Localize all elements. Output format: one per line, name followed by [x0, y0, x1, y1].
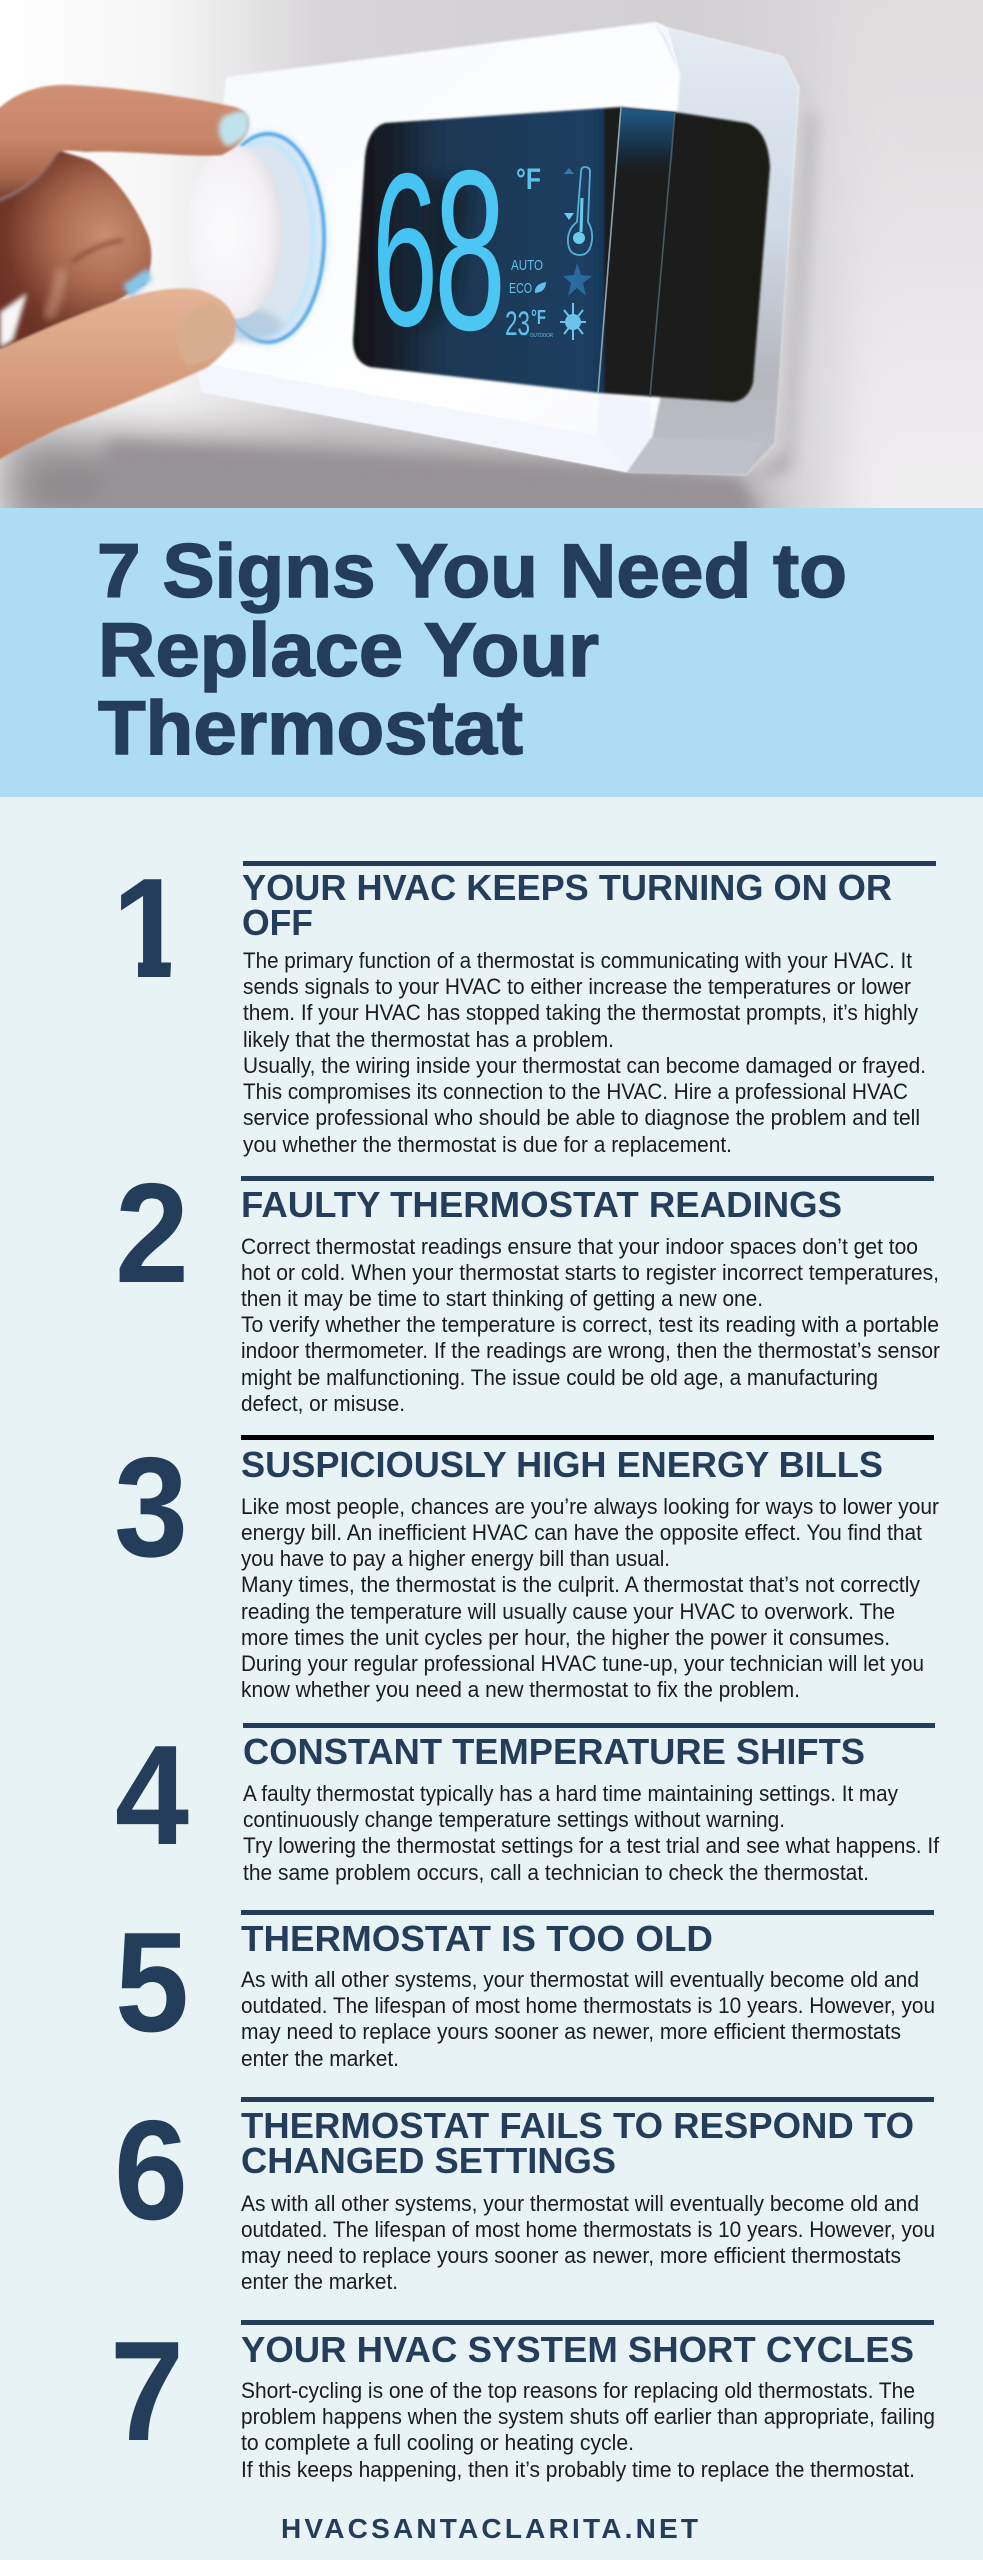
body text 7: If this keeps happening, then it’s probably time to replace the thermostat.: [241, 2457, 915, 2482]
body text 5: may need to replace yours sooner as newer, more efficient thermostats: [241, 2019, 901, 2044]
body text 1: This compromises its connection to the HVAC. Hire a professional HVAC: [243, 1079, 908, 1104]
body text 1: The primary function of a thermostat is communicating with your HVAC. It: [243, 948, 912, 973]
body text 3: [241, 1494, 939, 1702]
icon: thermometer: [564, 167, 592, 255]
body text 4: the same problem occurs, call a technician to check the thermostat.: [243, 1860, 869, 1885]
title: Thermostat: [98, 686, 523, 771]
body text 5: outdated. The lifespan of most home thermostats is 10 years. However, you: [241, 1993, 935, 2018]
body text 2: [241, 1234, 940, 1416]
body text 3: During your regular professional HVAC tune-up, your technician will let you: [241, 1651, 924, 1676]
sign 2: [115, 1154, 940, 1416]
body text 4: continuously change temperature settings without warning.: [243, 1807, 785, 1832]
body text 4: Try lowering the thermostat settings for a test trial and see what happens. If: [243, 1833, 940, 1858]
divider rule 4: [243, 1723, 935, 1728]
divider rule 7: [241, 2320, 934, 2325]
display labels: °F: [516, 163, 541, 196]
body text 5: enter the market.: [241, 2046, 399, 2071]
title band: [0, 508, 983, 797]
sign 6: [114, 2091, 935, 2294]
body text 6: may need to replace yours sooner as newer, more efficient thermostats: [241, 2243, 901, 2268]
heading 6: [241, 2105, 914, 2181]
divider rule 6: [241, 2097, 934, 2102]
body text 2: might be malfunctioning. The issue could be old age, a manufacturing: [241, 1365, 878, 1390]
sign 7: [110, 2312, 935, 2482]
title: Replace Your: [98, 608, 599, 693]
body text 4: [243, 1781, 940, 1885]
number 4: 4: [115, 1716, 189, 1875]
body text 2: hot or cold. When your thermostat starts to register incorrect temperatures,: [241, 1260, 939, 1285]
number 3: 3: [114, 1428, 188, 1587]
display labels: OUTDOOR: [530, 333, 553, 339]
thermostat body: [196, 22, 799, 475]
body text 3: reading the temperature will usually cause your HVAC to overwork. The: [241, 1599, 895, 1624]
body text 2: To verify whether the temperature is correct, test its reading with a portable: [241, 1312, 939, 1337]
thermostat screen: 8: [434, 124, 506, 378]
body text 3: know whether you need a new thermostat to fix the problem.: [241, 1677, 800, 1702]
body text 5: As with all other systems, your thermostat will eventually become old and: [241, 1967, 919, 1992]
body text 1: [243, 948, 926, 1157]
number 2: 2: [115, 1154, 189, 1313]
number 5: 5: [115, 1903, 189, 2062]
body text 3: you have to pay a higher energy bill than usual.: [241, 1546, 670, 1571]
heading 2: FAULTY THERMOSTAT READINGS: [241, 1184, 842, 1225]
dial ring and knob: [187, 132, 326, 344]
sign 1: [112, 849, 936, 1157]
heading 5: THERMOSTAT IS TOO OLD: [241, 1918, 713, 1959]
heading 1: YOUR HVAC KEEPS TURNING ON OR: [242, 867, 892, 908]
body text 1: sends signals to your HVAC to either increase the temperatures or lower: [243, 974, 911, 999]
footer website: HVACSANTACLARITA.NET: [281, 2513, 698, 2544]
display labels: 23: [505, 305, 530, 343]
body text 7: Short-cycling is one of the top reasons for replacing old thermostats. The: [241, 2378, 915, 2403]
body text 2: then it may be time to start thinking of getting a new one.: [241, 1286, 763, 1311]
heading 1: OFF: [242, 902, 313, 943]
title: [97, 529, 847, 771]
body text 6: outdated. The lifespan of most home thermostats is 10 years. However, you: [241, 2217, 935, 2242]
body text 5: [241, 1967, 935, 2071]
body text 3: more times the unit cycles per hour, the higher the power it consumes.: [241, 1625, 890, 1650]
heading 6: CHANGED SETTINGS: [241, 2140, 616, 2181]
display labels: ECO: [509, 280, 532, 297]
temperature reading: 6: [372, 129, 438, 372]
body text 7: [241, 2378, 935, 2482]
body text 1: service professional who should be able to diagnose the problem and tell: [243, 1105, 920, 1130]
body text 3: Many times, the thermostat is the culprit. A thermostat that’s not correctly: [241, 1572, 920, 1597]
body text 4: A faulty thermostat typically has a hard time maintaining settings. It may: [243, 1781, 898, 1806]
divider rule 2: [241, 1176, 934, 1181]
divider rule 5: [241, 1910, 934, 1915]
body text 3: Like most people, chances are you’re always looking for ways to lower your: [241, 1494, 939, 1519]
divider rule 1: [243, 861, 936, 866]
hero photo: hand turning a thermostat dial: [0, 0, 983, 508]
body text 6: As with all other systems, your thermostat will eventually become old and: [241, 2191, 919, 2216]
body text 6: [241, 2191, 935, 2294]
divider rule 3: [241, 1435, 934, 1440]
number 6: 6: [114, 2091, 188, 2250]
sign 5: [115, 1903, 935, 2071]
icon: sun: [560, 303, 586, 340]
icon: snow star: [563, 263, 592, 296]
body text 1: Usually, the wiring inside your thermostat can become damaged or frayed.: [243, 1053, 926, 1078]
display labels: °F: [531, 307, 546, 329]
body text 7: to complete a full cooling or heating cycle.: [241, 2430, 634, 2455]
heading 4: CONSTANT TEMPERATURE SHIFTS: [243, 1731, 865, 1772]
hand: [0, 85, 249, 462]
number 7: 7: [110, 2312, 184, 2471]
number 1: 1: [112, 849, 186, 1008]
title: 7 Signs You Need to: [97, 529, 847, 614]
body text 3: energy bill. An inefficient HVAC can have the opposite effect. You find that: [241, 1520, 922, 1545]
heading 3: SUSPICIOUSLY HIGH ENERGY BILLS: [241, 1444, 883, 1485]
thermostat screen: [353, 107, 770, 402]
display labels: [505, 163, 553, 343]
body text 2: indoor thermometer. If the readings are wrong, then the thermostat’s sensor: [241, 1338, 940, 1363]
body text 6: enter the market.: [241, 2269, 398, 2294]
display labels: AUTO: [511, 257, 543, 274]
sign 3: [114, 1428, 939, 1702]
heading 1: [242, 867, 892, 943]
sign 4: [115, 1716, 940, 1885]
body text 1: likely that the thermostat has a problem.: [243, 1027, 614, 1052]
heading 7: YOUR HVAC SYSTEM SHORT CYCLES: [241, 2329, 914, 2370]
body text 1: them. If your HVAC has stopped taking the thermostat prompts, it’s highly: [243, 1000, 918, 1025]
heading 6: THERMOSTAT FAILS TO RESPOND TO: [241, 2105, 914, 2146]
body text 2: defect, or misuse.: [241, 1391, 405, 1416]
body text 1: you whether the thermostat is due for a replacement.: [243, 1132, 732, 1157]
body text 7: problem happens when the system shuts off earlier than appropriate, failing: [241, 2404, 935, 2429]
body text 2: Correct thermostat readings ensure that your indoor spaces don’t get too: [241, 1234, 918, 1259]
